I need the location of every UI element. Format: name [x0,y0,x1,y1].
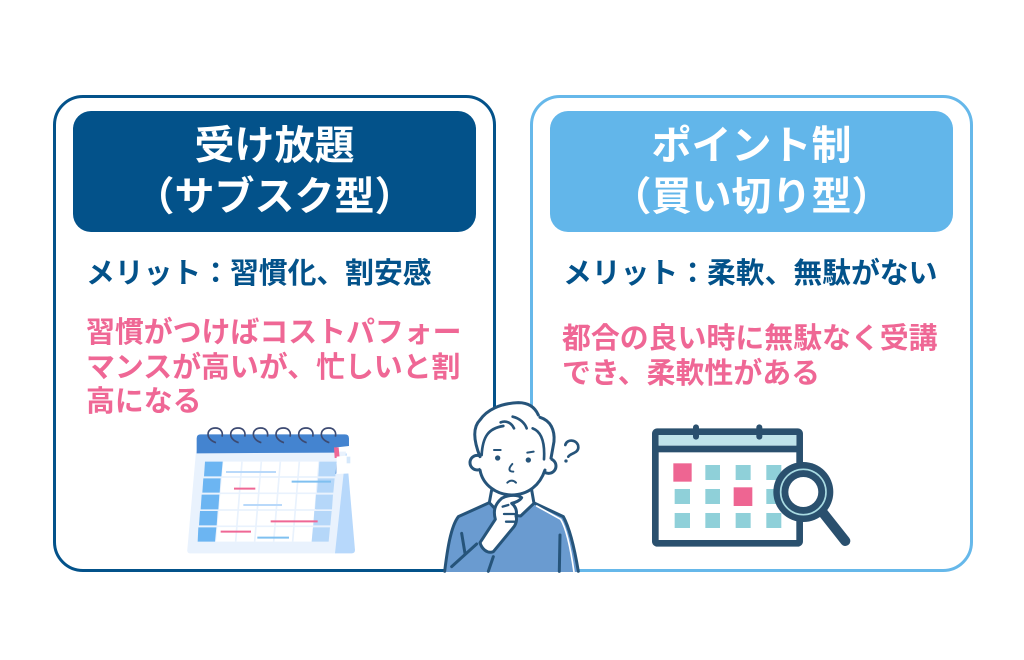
text: subscription description: マンスが高いが、忙しいと割 [86,352,460,384]
text: subscription description: 習慣がつけばコストパフォー [86,317,462,349]
heading: subscription: （サブスク型） [134,175,414,219]
heading: subscription [73,111,476,232]
text: subscription description [86,316,462,418]
heading: points [550,111,953,232]
text: subscription merit: メリット：習慣化、割安感 [86,258,432,290]
text: subscription description: 高になる [86,386,202,418]
text: points description: でき、柔軟性がある [562,358,820,390]
panel: points [530,95,973,572]
heading: points: ポイント制 [652,124,852,168]
text: points description: 都合の良い時に無駄なく受講 [562,323,938,355]
text: points description [562,323,938,390]
heading: subscription: 受け放題 [194,124,354,168]
heading: points: （買い切り型） [612,175,892,219]
panel: subscription [53,95,496,572]
text: points merit: メリット：柔軟、無駄がない [563,258,937,290]
